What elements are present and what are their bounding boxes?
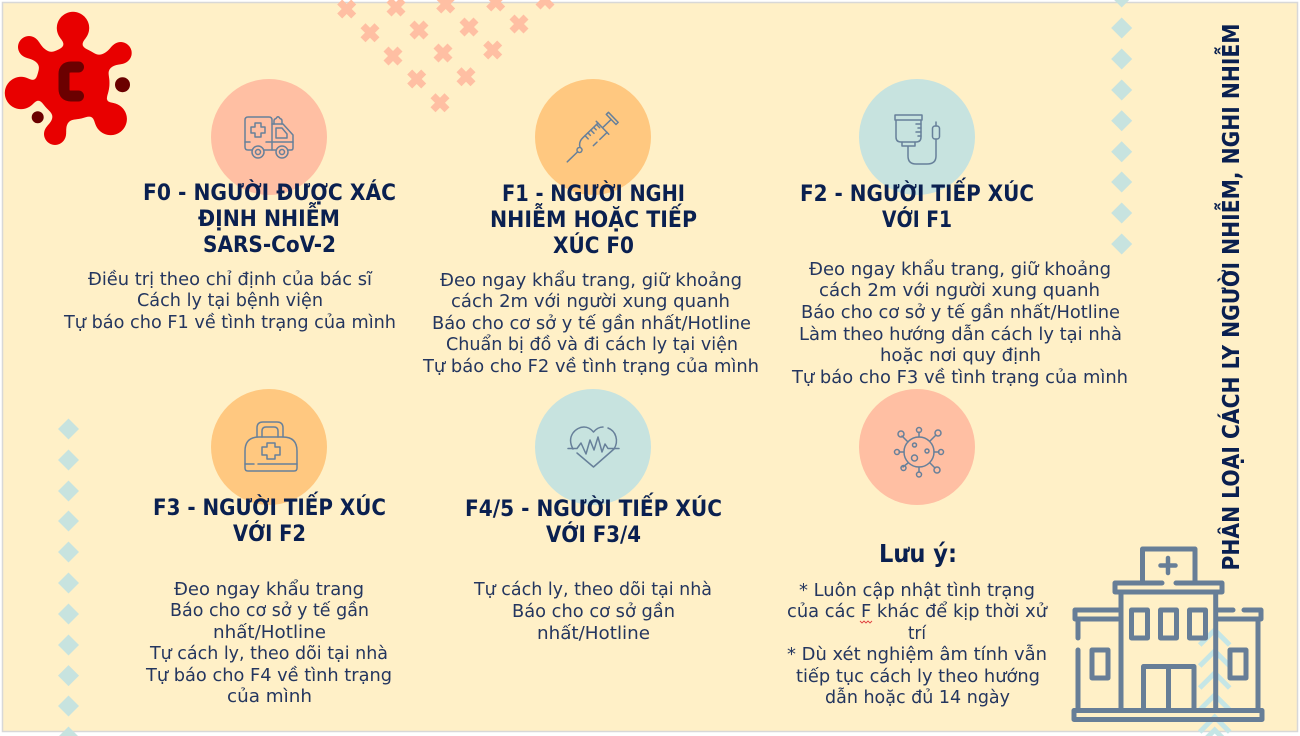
text: note content: tiếp tục cách ly theo hướng bbox=[796, 666, 1040, 687]
text: F3 instructions: nhất/Hotline bbox=[213, 622, 326, 643]
text: F4/5 instructions: Tự cách ly, theo dõi tại nhà bbox=[473, 579, 712, 600]
panel: F2 bbox=[791, 79, 1128, 388]
text: F4/5 instructions bbox=[473, 579, 712, 644]
heading: F4/5: VỚI F3/4 bbox=[546, 522, 641, 548]
text: note content: dẫn hoặc đủ 14 ngày bbox=[825, 687, 1010, 708]
text: F0 instructions: Điều trị theo chỉ định của bác sĩ bbox=[88, 269, 373, 290]
text: F4/5 instructions: nhất/Hotline bbox=[537, 623, 650, 644]
heading: F2 bbox=[800, 178, 1034, 233]
icon: medical bag bbox=[211, 389, 327, 505]
text: F2 instructions: cách 2m với người xung quanh bbox=[819, 280, 1100, 301]
text: note content: của các F khác để kịp thời xử bbox=[787, 601, 1049, 622]
heading: F1: NHIỄM HOẶC TIẾP bbox=[490, 204, 697, 233]
heading: F1 bbox=[490, 181, 697, 259]
text: F2 instructions: Đeo ngay khẩu trang, giữ khoảng bbox=[809, 259, 1111, 280]
heading: F4/5: F4/5 - NGƯỜI TIẾP XÚC bbox=[465, 493, 722, 522]
icon: red virus logo bbox=[5, 12, 132, 145]
text: F0 instructions: Tự báo cho F1 về tình trạng của mình bbox=[63, 312, 396, 333]
icon: virus outline bbox=[859, 389, 975, 505]
icon: IV drip bag bbox=[859, 79, 975, 195]
panel: F0 bbox=[63, 79, 396, 333]
heading: F4/5 bbox=[465, 493, 722, 548]
text: note content: * Luôn cập nhật tình trạng bbox=[799, 580, 1035, 601]
text: F1 instructions bbox=[422, 270, 759, 377]
text: F3 instructions: Đeo ngay khẩu trang bbox=[174, 579, 364, 600]
text: F1 instructions: Chuẩn bị đồ và đi cách ly tại viện bbox=[446, 334, 738, 355]
panel: note bbox=[787, 389, 1049, 708]
text: F1 instructions: cách 2m với người xung quanh bbox=[451, 291, 730, 312]
heading: F3: VỚI F2 bbox=[233, 521, 306, 547]
text: F3 instructions: Tự cách ly, theo dõi tại nhà bbox=[149, 643, 388, 664]
heading: note: Lưu ý: bbox=[879, 539, 957, 568]
text: F1 instructions: Báo cho cơ sở y tế gần nhất/Hotline bbox=[432, 313, 751, 334]
heading: F3: F3 - NGƯỜI TIẾP XÚC bbox=[153, 492, 386, 521]
icon: heart with pulse bbox=[535, 389, 651, 505]
panel: F4/5 bbox=[465, 389, 722, 644]
text: F3 instructions: của mình bbox=[227, 686, 312, 707]
panel: F3 bbox=[145, 389, 392, 707]
text: F2 instructions: hoặc nơi quy định bbox=[880, 345, 1041, 366]
decoration: bottom left diamonds bbox=[58, 418, 79, 736]
text: F2 instructions: Báo cho cơ sở y tế gần nhất/Hotline bbox=[801, 302, 1120, 323]
heading: F0 bbox=[143, 180, 396, 258]
text: F1 instructions: Tự báo cho F2 về tình trạng của mình bbox=[422, 356, 759, 377]
icon: syringe bbox=[535, 79, 651, 195]
decoration: top right diamonds bbox=[1111, 0, 1132, 254]
text: F4/5 instructions: Báo cho cơ sở gần bbox=[512, 601, 675, 622]
heading: F0: SARS-CoV-2 bbox=[203, 233, 336, 258]
heading: F3 bbox=[153, 492, 386, 547]
text: F2 instructions: Tự báo cho F3 về tình trạng của mình bbox=[791, 367, 1128, 388]
heading: F1: XÚC F0 bbox=[553, 233, 634, 259]
text: F2 instructions: Làm theo hướng dẫn cách ly tại nhà bbox=[799, 324, 1122, 345]
text: note content: trí bbox=[908, 623, 927, 644]
text: F2 instructions bbox=[791, 259, 1128, 388]
heading: F2: VỚI F1 bbox=[882, 207, 952, 233]
icon: ambulance bbox=[211, 79, 327, 195]
panel: F1 bbox=[422, 79, 759, 377]
heading: F0: ĐỊNH NHIỄM bbox=[198, 203, 340, 232]
text: F0 instructions bbox=[63, 269, 396, 333]
text: F0 instructions: Cách ly tại bệnh viện bbox=[137, 290, 323, 311]
heading: F2: F2 - NGƯỜI TIẾP XÚC bbox=[800, 178, 1034, 207]
decoration: bottom right chevrons bbox=[1200, 630, 1230, 736]
heading: F0: F0 - NGƯỜI ĐƯỢC XÁC bbox=[143, 180, 396, 206]
decoration: pink crosses bbox=[337, 0, 554, 112]
text: F3 instructions: Tự báo cho F4 về tình trạng bbox=[145, 665, 392, 686]
text: F3 instructions bbox=[145, 579, 392, 707]
icon: hospital building bbox=[1074, 549, 1262, 720]
text: F1 instructions: Đeo ngay khẩu trang, giữ khoảng bbox=[440, 270, 742, 291]
heading: F1: F1 - NGƯỜI NGHI bbox=[502, 181, 685, 207]
text: F3 instructions: Báo cho cơ sở y tế gần bbox=[170, 600, 369, 621]
text: note content bbox=[787, 580, 1049, 708]
text: note content: * Dù xét nghiệm âm tính vẫn bbox=[787, 644, 1047, 665]
